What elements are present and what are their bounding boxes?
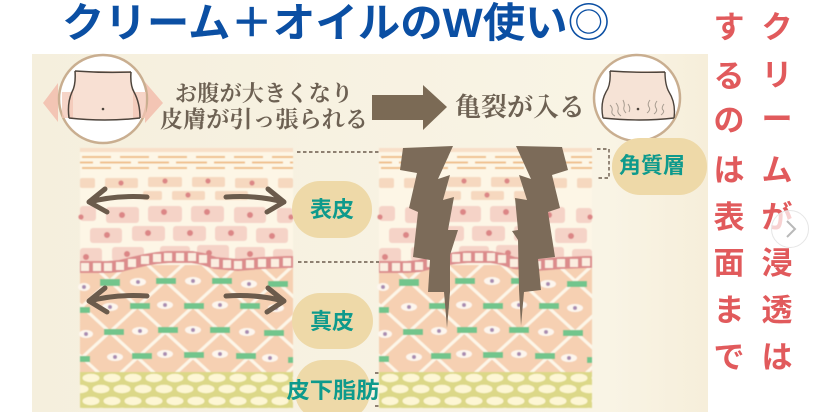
text: cream penetration column left: す (714, 10, 744, 45)
text: cream penetration column right: リ (762, 58, 792, 93)
text: cream penetration column right: ク (762, 10, 792, 45)
chart: stretch mark crack left (400, 146, 458, 328)
text: cream penetration column right: 浸 (762, 246, 792, 281)
text: cream penetration column left: は (714, 153, 744, 188)
text: cream penetration column left: で (714, 340, 744, 375)
arrow: to stretch marks (372, 85, 447, 130)
label: dermis (292, 293, 373, 349)
chart: stretch mark crack right (512, 146, 568, 326)
arrow: dermis stretch left (89, 288, 147, 312)
panel: cracked skin cross-section (377, 148, 593, 408)
text: cream penetration column right: が (762, 200, 792, 235)
text: cream penetration column left (714, 10, 744, 375)
text: belly stretches: お腹が大きくなり (175, 81, 353, 106)
panel: healthy skin cross-section (78, 148, 294, 408)
text: cream penetration column left: 面 (714, 246, 744, 281)
label: epidermis: 表皮 (310, 197, 354, 222)
text: cream penetration column right: 透 (762, 293, 792, 328)
label: stratum corneum: 角質層 (619, 153, 685, 178)
icon: belly before (43, 55, 163, 143)
text: cream penetration column right: ム (762, 153, 792, 188)
arrow: epidermis stretch left (89, 189, 147, 212)
title: クリーム＋オイルのW使い ◎ (62, 0, 610, 46)
label: subcutaneous fat (286, 360, 380, 412)
arrow: dermis stretch right (226, 288, 284, 312)
icon: belly after (594, 55, 680, 141)
icon: carousel next button (772, 210, 808, 248)
text: cream penetration column left: の (714, 103, 744, 138)
text: cream penetration column left: ま (714, 293, 744, 328)
text: cream penetration column left: る (714, 59, 744, 94)
text: cream penetration column right: ー (762, 102, 792, 137)
text: stretch marks appear: 亀裂が入る (455, 93, 585, 122)
text: cream penetration column left: 表 (714, 200, 744, 235)
label: dermis: 真皮 (310, 309, 354, 334)
label: stratum corneum (612, 138, 707, 195)
text: belly stretches (160, 81, 368, 132)
label: subcutaneous fat: 皮下脂肪 (286, 378, 380, 403)
arrow: epidermis stretch right (226, 189, 284, 212)
text: cream penetration column right (762, 10, 792, 375)
label: epidermis (292, 181, 372, 238)
text: cream penetration column right: は (762, 340, 792, 375)
text: belly stretches: 皮膚が引っ張られる (160, 107, 368, 132)
panel: skin diagram background (32, 54, 708, 412)
